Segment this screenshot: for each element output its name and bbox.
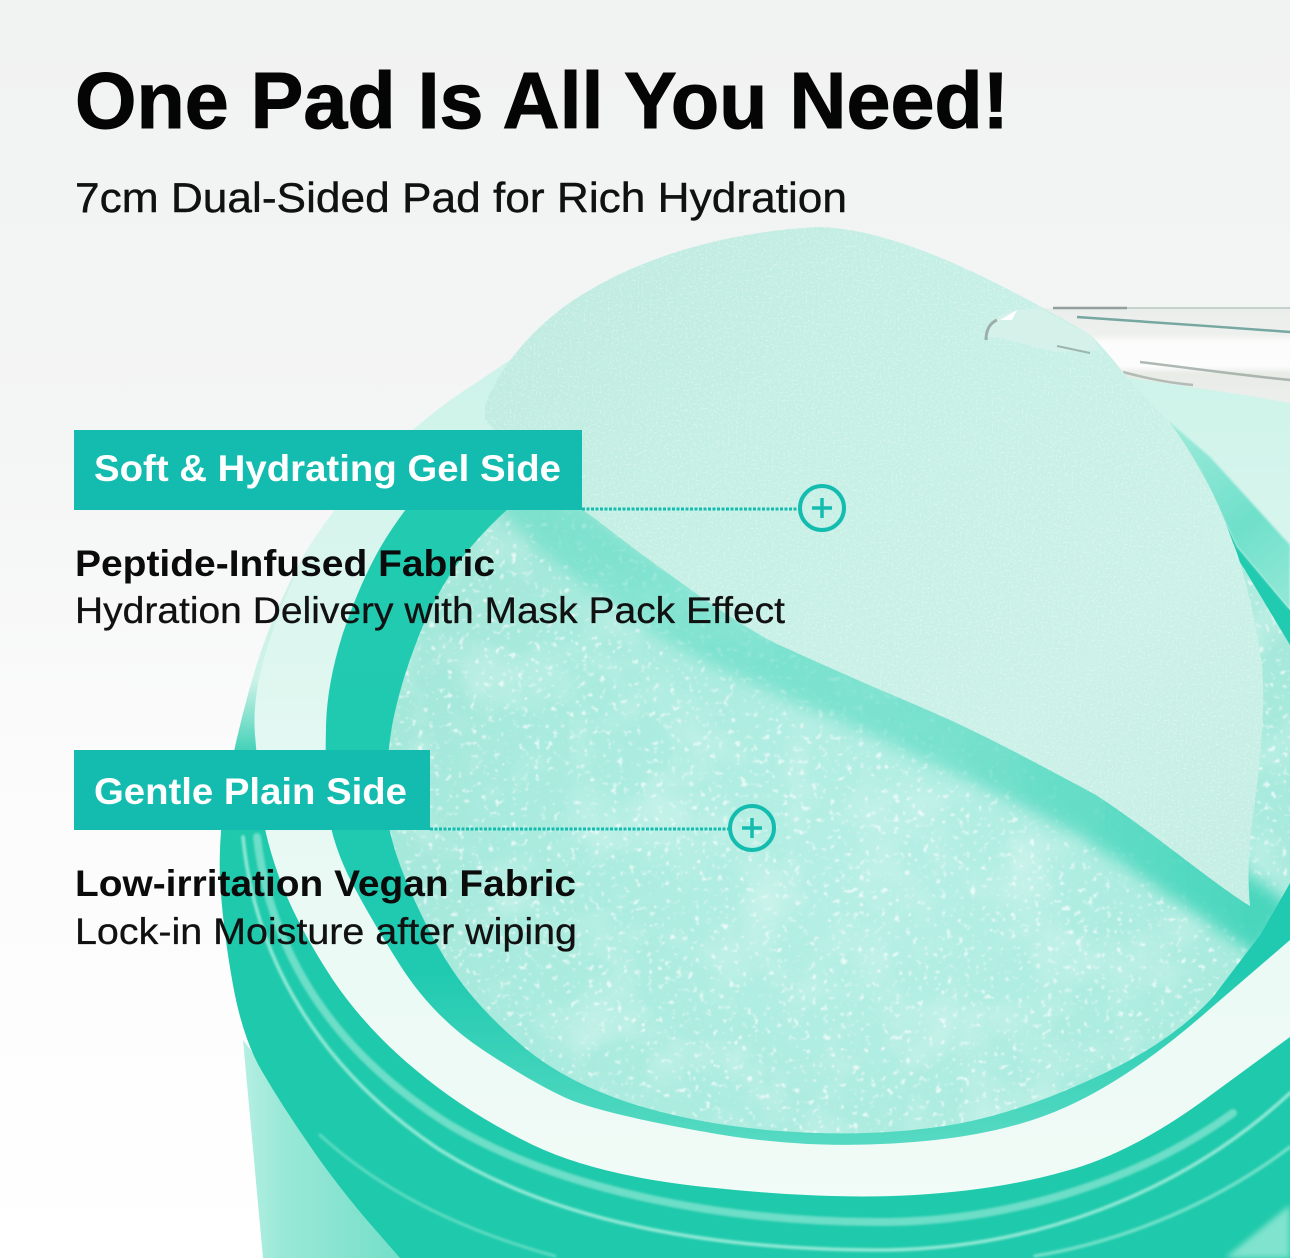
jar corner highlight xyxy=(1225,1205,1290,1258)
callout: plain side xyxy=(74,750,774,952)
text: peptide fabric: Peptide-Infused Fabric xyxy=(75,543,495,584)
pad speckle texture xyxy=(380,470,1290,1140)
title: One Pad Is All You Need! xyxy=(75,56,1009,145)
right rim shade xyxy=(1167,420,1290,610)
text: vegan fabric: Lock-in Moisture after wiping xyxy=(75,911,577,952)
shadow under sheet xyxy=(510,480,1275,930)
connector: plain side xyxy=(430,828,730,830)
text: vegan fabric xyxy=(75,863,577,952)
text: peptide fabric xyxy=(75,543,786,631)
subtitle: 7cm Dual-Sided Pad for Rich Hydration xyxy=(75,174,847,221)
pipette tip over sheet xyxy=(985,308,1100,353)
pad blotches xyxy=(408,524,1290,1134)
label: gel side xyxy=(74,430,582,510)
jar illustration xyxy=(220,300,1290,1258)
label: plain side xyxy=(74,750,430,830)
pad stack xyxy=(380,470,1290,1140)
white ring xyxy=(254,300,1290,1196)
sheet pad lifted by pipette xyxy=(470,220,1280,920)
connector: gel side xyxy=(582,508,800,510)
jar body xyxy=(243,1040,410,1258)
jar outer teal rim xyxy=(220,300,1290,1258)
callout: gel side xyxy=(74,430,844,631)
label: plain side: Gentle Plain Side xyxy=(94,771,407,812)
icon: plus marker gel side xyxy=(800,486,844,530)
text: peptide fabric: Hydration Delivery with Mask Pack Effect xyxy=(75,590,786,631)
jar grooves xyxy=(243,837,1290,1256)
inner teal band xyxy=(326,440,1290,1145)
text: vegan fabric: Low-irritation Vegan Fabric xyxy=(75,863,576,904)
icon: plus marker plain side xyxy=(730,806,774,850)
pipette xyxy=(1033,308,1290,403)
label: gel side: Soft & Hydrating Gel Side xyxy=(94,448,561,489)
